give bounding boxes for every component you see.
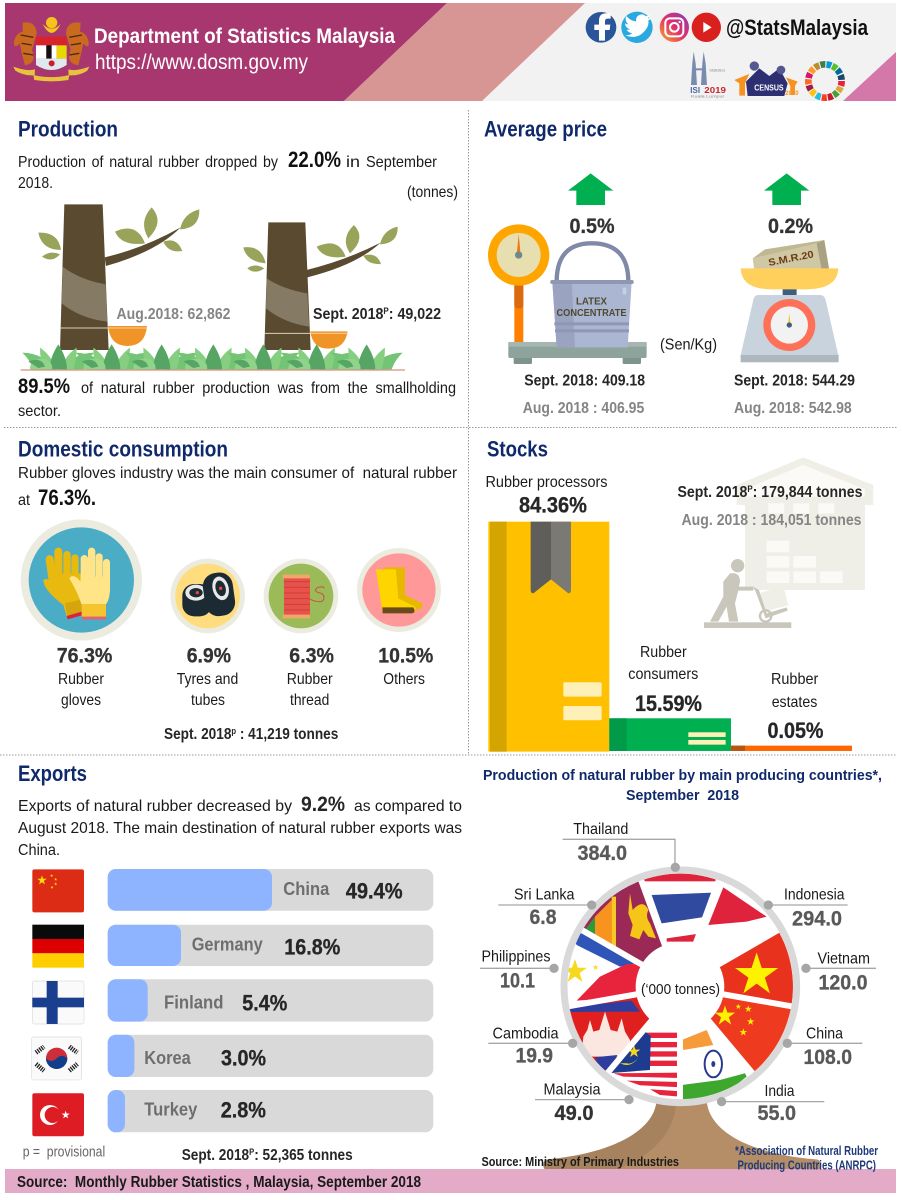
exports intro text: August 2018. The main destination of natural rubber exports was	[18, 820, 462, 837]
exports intro text	[18, 793, 462, 859]
chart title: September 2018	[626, 787, 739, 804]
header banner	[5, 3, 896, 105]
icon: flag finland	[32, 981, 84, 1024]
label: india: 55.0	[758, 1101, 796, 1125]
label: vietnam: 120.0	[818, 970, 868, 994]
social media handle: @StatsMalaysia	[726, 15, 869, 40]
label: august production: Aug.2018: 62,862	[116, 306, 231, 323]
icon: rubber gloves	[21, 519, 142, 641]
label: thailand: Thailand	[573, 821, 628, 838]
provisional note: p = provisional	[23, 1144, 105, 1160]
label: sri lanka: 6.8	[530, 905, 557, 929]
logo: SDG wheel	[801, 57, 849, 105]
leader lines	[480, 839, 876, 1106]
bar: germany: Germany	[192, 934, 263, 955]
wedge: malaysia	[612, 1032, 677, 1096]
header url: https://www.dosm.gov.my	[95, 51, 308, 74]
stock readings: Aug. 2018 : 184,051 tonnes	[682, 512, 862, 529]
icon: rubber boots	[357, 548, 441, 632]
wedge: indonesia	[708, 887, 766, 925]
label: rubber consumers: 15.59%	[635, 691, 702, 716]
logo: census 2020: CENSUS	[754, 83, 784, 93]
label: cambodia: 19.9	[516, 1044, 553, 1068]
bar: germany	[108, 925, 433, 966]
logo: ISI 2019: 2019	[704, 85, 726, 95]
wedge: thailand	[644, 874, 716, 942]
consumption intro text	[18, 465, 458, 510]
label: rubber processors: 84.36%	[519, 492, 587, 518]
chart title	[483, 767, 882, 804]
bar: finland	[108, 979, 433, 1022]
bucket label	[556, 296, 626, 319]
label: sri lanka	[514, 886, 575, 929]
label: philippines: 10.1	[500, 968, 535, 992]
bar: korea: Korea	[144, 1047, 191, 1068]
icon: tyres	[170, 559, 245, 633]
bar: finland: 5.4%	[242, 991, 287, 1016]
wedge: philippines	[568, 933, 640, 1001]
consumption total: : 41,219 tonnes	[236, 726, 338, 743]
stat: others: Others	[383, 671, 425, 688]
exports intro text: Exports of natural rubber decreased by	[18, 798, 292, 815]
exports total: P	[249, 1147, 254, 1157]
chart title: Production of natural rubber by main producing countries*,	[483, 767, 882, 784]
stock readings: P	[747, 484, 753, 494]
stat: gloves: 76.3%	[57, 644, 112, 668]
icon: flag germany	[32, 925, 84, 968]
panel: average price	[484, 116, 855, 417]
label: rubber processors	[486, 474, 608, 518]
heading: stocks: Stocks	[487, 436, 548, 462]
logo: ISI 2019	[690, 52, 726, 98]
exports total: : 52,365 tonnes	[254, 1147, 353, 1164]
stock readings	[678, 484, 863, 529]
icon: flag turkey	[32, 1093, 84, 1136]
panel: stocks	[486, 436, 873, 752]
icon: thread spool	[264, 559, 338, 633]
icon: coat of arms	[13, 17, 89, 81]
header pink diagonal band	[344, 3, 585, 101]
production intro text: 2018.	[18, 175, 53, 192]
label: sri lanka: Sri Lanka	[514, 886, 575, 904]
icon: kitchen scale with smr20 block	[740, 240, 839, 362]
bar chart: export destinations	[108, 869, 433, 1132]
stat: gloves: gloves	[61, 692, 101, 709]
panel: production	[18, 116, 458, 420]
label: india: India	[764, 1083, 795, 1100]
label: september production: : 49,022	[389, 306, 441, 323]
source bar: Source: Monthly Rubber Statistics , Malaysia, September 2018	[17, 1174, 421, 1191]
illustration: rubber trees	[21, 204, 405, 370]
bar: germany: 16.8%	[284, 934, 340, 959]
smallholding share text: 89.5%	[18, 375, 70, 398]
label: indonesia: 294.0	[792, 906, 842, 930]
logo: ISI 2019: ISI	[690, 86, 700, 95]
label: rubber estates: 0.05%	[768, 718, 824, 743]
bar: china: 49.4%	[346, 878, 403, 904]
stat: tyres: 6.9%	[187, 644, 231, 668]
logo: census 2020: 2020	[785, 91, 799, 97]
label: rubber estates: Rubber	[771, 671, 819, 688]
stat: thread	[287, 644, 334, 709]
label: malaysia	[544, 1082, 601, 1125]
stat: thread: thread	[290, 692, 329, 709]
exports intro text: China.	[18, 842, 60, 859]
label: rubber consumers	[628, 644, 702, 716]
label: vietnam	[818, 950, 870, 994]
stat: others	[378, 644, 433, 688]
wedge: sri lanka	[584, 882, 662, 962]
stock readings: Sept. 2018	[678, 484, 757, 501]
icon: up arrow smr20	[764, 173, 809, 205]
label: indonesia	[784, 886, 845, 930]
price readings: Sept. 2018: 544.29	[734, 372, 855, 390]
heading: average price: Average price	[484, 116, 607, 142]
label: rubber estates: estates	[772, 694, 817, 711]
label: rubber consumers: consumers	[628, 666, 698, 683]
production intro text: September	[366, 154, 438, 171]
bar: china: China	[283, 878, 330, 899]
source bar	[5, 1169, 896, 1193]
footnote: anrpc	[735, 1144, 878, 1172]
exports intro text: 9.2%	[301, 793, 345, 816]
bar: turkey: 2.8%	[221, 1097, 266, 1122]
label: thailand: 384.0	[578, 841, 627, 865]
exports total: Sept. 2018	[182, 1147, 261, 1164]
label: cambodia: Cambodia	[492, 1026, 559, 1042]
label: vietnam: Vietnam	[818, 950, 870, 968]
label: cambodia	[492, 1026, 559, 1068]
price readings: Aug. 2018: 542.98	[734, 400, 852, 417]
stat: tyres: tubes	[191, 692, 225, 709]
stat: thread: 6.3%	[289, 644, 334, 668]
icon: flag south korea	[32, 1037, 82, 1080]
label: philippines: Philippines	[482, 948, 550, 966]
flag wheel	[560, 866, 800, 1106]
icon: flag china	[32, 869, 84, 912]
label: philippines	[482, 948, 550, 992]
bar: rubber estates	[731, 746, 852, 751]
smallholding share text: sector.	[18, 403, 61, 420]
production intro text	[18, 147, 438, 192]
bar: korea: 3.0%	[221, 1046, 266, 1071]
bar: rubber consumers	[609, 718, 731, 751]
smallholding share text	[18, 375, 456, 420]
stock readings: : 179,844 tonnes	[753, 484, 863, 501]
consumption intro text: at	[18, 492, 30, 509]
consumption intro text: Rubber gloves industry was the main consumer of natural rubber	[18, 465, 458, 482]
bucket label: CONCENTRATE	[556, 307, 626, 319]
social media icons	[586, 12, 721, 43]
label: thailand	[573, 821, 628, 865]
bar: rubber processors	[488, 522, 609, 752]
source note: ministry: Source: Ministry of Primary Industries	[482, 1155, 679, 1169]
icon: up arrow latex	[568, 173, 613, 205]
unit label: (tonnes)	[407, 184, 458, 201]
logo: ISI 2019: Statistics	[709, 68, 725, 73]
price readings: Sept. 2018: 409.18	[524, 372, 645, 390]
price readings: Aug. 2018 : 406.95	[523, 400, 644, 417]
price readings	[523, 372, 855, 417]
label: rubber processors: Rubber processors	[486, 474, 608, 491]
smallholding share text: of natural rubber production was from the smallholding	[81, 380, 456, 397]
production intro text: in	[346, 154, 360, 171]
unit label: (Sen/Kg)	[660, 336, 717, 354]
heading: production: Production	[18, 116, 118, 142]
header corner triangle	[843, 52, 896, 101]
bar: korea	[108, 1035, 433, 1077]
heading: exports: Exports	[18, 761, 87, 786]
wedge: vietnam	[720, 932, 793, 1004]
stat: thread: Rubber	[287, 671, 333, 688]
panel: production by countries	[480, 767, 882, 1171]
bar: finland: Finland	[164, 991, 224, 1012]
block label: S.M.R.20	[767, 249, 815, 269]
consumption intro text: 76.3%.	[38, 485, 96, 510]
label: september production: P	[383, 306, 389, 316]
value: latex change: 0.5%	[570, 214, 614, 238]
label: china: 108.0	[804, 1045, 852, 1069]
tree stand	[543, 1100, 821, 1171]
label: malaysia: Malaysia	[544, 1082, 601, 1098]
panel: domestic consumption	[18, 436, 458, 743]
heading: domestic consumption: Domestic consumption	[18, 436, 228, 462]
stat: tyres: Tyres and	[177, 671, 238, 688]
illustration: warehouse and worker	[704, 457, 873, 628]
stat: gloves: Rubber	[58, 671, 105, 688]
label: china	[804, 1026, 852, 1069]
label: india	[758, 1083, 796, 1125]
header purple panel	[5, 3, 447, 101]
label: indonesia: Indonesia	[784, 886, 845, 904]
wedge: cambodia	[570, 997, 650, 1071]
production intro text: 22.0%	[288, 147, 341, 172]
bucket label: LATEX	[576, 296, 607, 308]
label: malaysia: 49.0	[554, 1101, 594, 1125]
unit label: (‘000 tonnes)	[641, 981, 720, 998]
label: september production: Sept. 2018	[313, 306, 392, 323]
stat: gloves	[57, 644, 112, 709]
wedge: india	[682, 1030, 747, 1100]
stat: tyres	[177, 644, 238, 709]
value: smr20 change: 0.2%	[768, 214, 813, 238]
exports intro text: as compared to	[354, 798, 462, 815]
label: china: China	[806, 1026, 843, 1042]
panel: exports	[18, 761, 462, 1164]
bar: turkey: Turkey	[144, 1099, 198, 1120]
label: rubber consumers: Rubber	[640, 644, 687, 661]
logo: census 2020	[734, 61, 799, 97]
bar: turkey	[108, 1090, 433, 1132]
wedge: china	[710, 997, 791, 1072]
icon: platform scale with latex bucket	[488, 224, 647, 364]
consumption total: p	[231, 726, 237, 736]
stat: others: 10.5%	[378, 644, 433, 668]
consumption total: Sept. 2018	[164, 726, 243, 743]
label: rubber estates	[768, 671, 824, 743]
production intro text: Production of natural rubber dropped by	[18, 154, 278, 171]
logo: ISI 2019: Kuala Lumpur	[691, 94, 726, 98]
bar: china	[108, 869, 433, 911]
header title: Department of Statistics Malaysia	[94, 25, 395, 48]
